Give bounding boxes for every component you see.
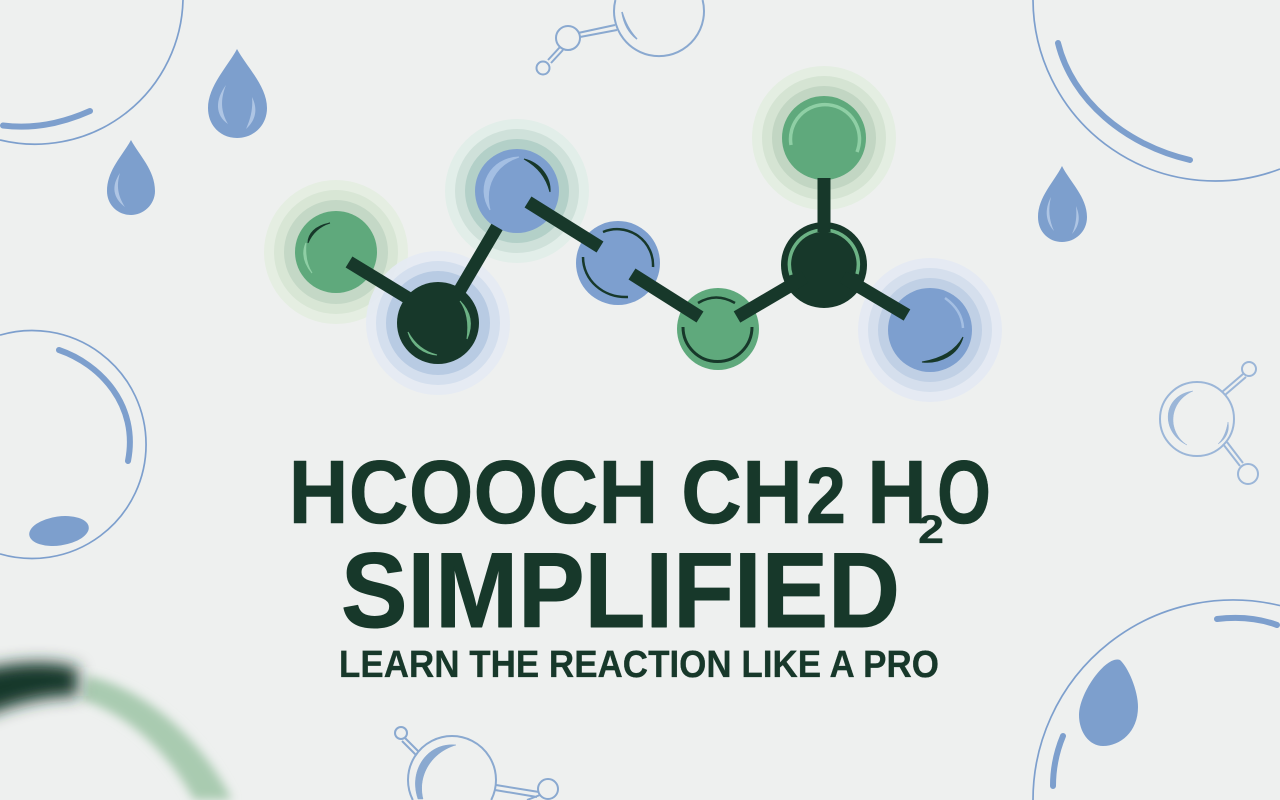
atom: dark right xyxy=(781,222,867,308)
atom: blue middle xyxy=(576,221,660,305)
title line: formula: HCOOCH xyxy=(288,443,658,543)
atom: green left xyxy=(295,211,377,293)
bonds xyxy=(349,178,907,317)
bubble: top left xyxy=(0,0,183,144)
title line: formula: 2 xyxy=(918,508,944,552)
blurred foreground ring xyxy=(0,662,232,800)
molecule outline: bottom centre xyxy=(395,727,558,800)
icon: large water drop xyxy=(208,49,267,138)
atom: green top xyxy=(782,96,866,180)
icon: small water drop xyxy=(107,140,155,215)
title line: formula xyxy=(288,443,991,552)
molecule outline: top centre xyxy=(536,0,704,74)
atom halo: blue right xyxy=(858,258,1002,402)
title line: formula: CH xyxy=(681,443,803,543)
title line: formula: 2 xyxy=(806,451,846,540)
atom: blue upper xyxy=(475,149,559,233)
atom halo: green top xyxy=(752,66,896,210)
title line: formula: O xyxy=(937,443,991,543)
molecule outline: right xyxy=(1160,362,1258,484)
atom halo: dark left xyxy=(366,251,510,395)
title line: simplified: SIMPLIFIED xyxy=(341,530,900,650)
atom: dark left xyxy=(397,282,479,364)
molecule diagram xyxy=(264,66,1002,402)
atom halo: blue upper xyxy=(445,119,589,263)
bubble: bottom right xyxy=(1033,600,1280,800)
atom: green middle xyxy=(677,288,759,370)
title line: formula: H xyxy=(867,443,927,543)
atom halo: green left xyxy=(264,180,408,324)
atom: blue right xyxy=(888,288,972,372)
bubble: left middle xyxy=(0,331,146,558)
icon: right water drop xyxy=(1038,166,1087,242)
bubble: top right xyxy=(1033,0,1280,181)
tagline: LEARN THE REACTION LIKE A PRO xyxy=(339,644,939,686)
